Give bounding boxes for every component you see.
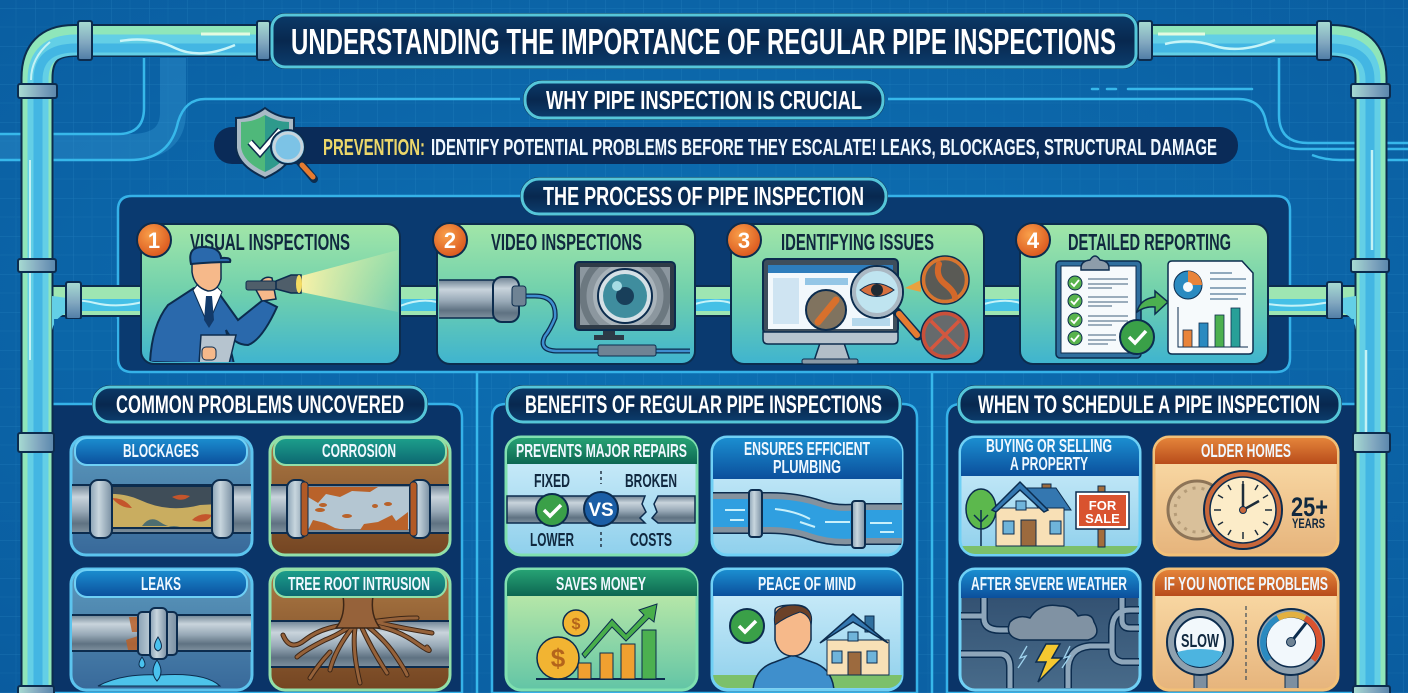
heading: benefits: BENEFITS OF REGULAR PIPE INSPECTIONS: [525, 391, 882, 419]
badge 1: [137, 223, 171, 257]
background patches beside process panel: [54, 319, 1354, 371]
card header: [960, 570, 1141, 598]
panel: schedule background: [947, 404, 1380, 693]
prevention label: PREVENTION:: [323, 134, 425, 160]
card header: A PROPERTY: [1010, 454, 1088, 474]
title: [270, 13, 1138, 69]
icon: large check badge: [1120, 320, 1154, 354]
heading: when to schedule: [957, 385, 1342, 424]
illustration: house for sale: [960, 482, 1141, 555]
card header: PREVENTS MAJOR REPAIRS: [516, 441, 687, 461]
heading: benefits: [505, 385, 902, 424]
badge 1: 1: [148, 228, 160, 253]
icon: pipe camera and monitor: [436, 254, 690, 356]
badge 3: [727, 223, 761, 257]
pipe: junction fills: [52, 296, 1356, 330]
card header: PEACE OF MIND: [758, 574, 856, 594]
badge 4: 4: [1027, 228, 1040, 253]
card header: PLUMBING: [773, 457, 841, 477]
for sale sign: FOR: [1089, 498, 1117, 513]
comparison labels: [530, 471, 677, 550]
comparison labels: COSTS: [630, 530, 672, 550]
heading: why pipe inspection is crucial: WHY PIPE INSPECTION IS CRUCIAL: [546, 85, 862, 115]
illustration: person, check and house: [712, 605, 903, 690]
illustration: coins and rising chart: $: [551, 643, 566, 673]
pipe: right run: [1146, 34, 1372, 693]
card header: LEAKS: [141, 574, 181, 594]
icon: checklist: [1056, 256, 1141, 358]
card header: [960, 436, 1141, 476]
card header: ENSURES EFFICIENT: [744, 439, 870, 459]
pipe: left run: [30, 34, 262, 693]
illustration: coins and rising chart: $: [572, 616, 581, 633]
label: 25+ years: 25+: [1291, 492, 1328, 522]
illustration: pressure gauge: [1258, 609, 1324, 690]
badge 2: [433, 223, 467, 257]
card: prevents major repairs: [506, 437, 698, 555]
badge 2: 2: [444, 228, 456, 253]
card header: [712, 438, 903, 479]
card: corrosion: [270, 437, 450, 555]
card header: BUYING OR SELLING: [986, 436, 1112, 456]
heading: common problems uncovered: [92, 385, 428, 424]
step 1 title: VISUAL INSPECTIONS: [190, 229, 350, 255]
card: tree root intrusion: [270, 569, 450, 690]
card: after severe weather: [960, 569, 1150, 690]
label: 25+ years: [1291, 492, 1328, 531]
illustration: leaking pipe: [70, 608, 255, 686]
illustration: slow drain gauge: [1167, 606, 1246, 690]
step 2: video inspections: [436, 224, 695, 364]
card header: [274, 438, 446, 465]
illustration: coins and rising chart: [536, 604, 665, 679]
prevention bar: [214, 127, 1238, 164]
icon: report document: [1168, 261, 1253, 354]
card header: BLOCKAGES: [123, 441, 199, 461]
step 4 title: DETAILED REPORTING: [1068, 229, 1231, 255]
card: buying or selling: [960, 436, 1141, 555]
card header: [75, 570, 247, 597]
comparison labels: LOWER: [530, 530, 574, 550]
card: ensures efficient plumbing: [712, 437, 905, 555]
card: peace of mind: [712, 569, 903, 690]
mid horizontal pipe: [45, 285, 1365, 317]
comparison labels: FIXED: [534, 471, 570, 491]
card header: SAVES MONEY: [556, 574, 646, 594]
heading: the process of pipe inspection: THE PROCESS OF PIPE INSPECTION: [543, 181, 864, 211]
card header: [712, 570, 903, 596]
comparison labels: BROKEN: [625, 471, 677, 491]
heading: why pipe inspection is crucial: [523, 80, 885, 120]
card: saves money: [506, 569, 698, 690]
step 1: visual inspections: [141, 224, 400, 364]
card: blockages: [70, 437, 255, 555]
card header: CORROSION: [322, 441, 396, 461]
panel: process background: [118, 196, 1290, 372]
illustration: flowing water pipe: [712, 490, 905, 548]
card: if you notice problems: [1154, 569, 1339, 690]
card header: [506, 438, 698, 464]
step number badges: [137, 223, 1050, 257]
label: 25+ years: YEARS: [1292, 515, 1325, 531]
illustration: fixed vs broken pipe: [507, 471, 695, 548]
icon: computer with magnified defect: [763, 256, 969, 364]
badge 3: 3: [738, 228, 750, 253]
icon: shield with magnifier: [236, 108, 314, 179]
card: leaks: [70, 569, 255, 690]
card header: AFTER SEVERE WEATHER: [971, 574, 1127, 594]
step 2 title: VIDEO INSPECTIONS: [491, 229, 642, 255]
card header: OLDER HOMES: [1201, 441, 1291, 461]
card header: [75, 438, 247, 465]
badge 4: [1016, 223, 1050, 257]
illustration: storm over pipes: [960, 598, 1150, 690]
card header: IF YOU NOTICE PROBLEMS: [1164, 574, 1328, 594]
illustration: fixed vs broken pipe: VS: [588, 500, 614, 521]
card: older homes: [1154, 437, 1339, 555]
heading: the process of pipe inspection: [520, 177, 888, 216]
for sale sign: [1076, 492, 1129, 529]
illustration: roots around pipe: [270, 596, 450, 683]
card header: [274, 570, 446, 597]
panel: common problems background: [30, 404, 462, 693]
illustration: clocks: [1168, 471, 1282, 549]
illustration: blocked pipe: [70, 480, 255, 538]
card header: [1154, 570, 1339, 596]
illustration: slow drain gauge: SLOW: [1181, 631, 1219, 651]
step 3: identifying issues: [731, 224, 984, 364]
icon: arrow to report: [1137, 291, 1168, 314]
heading: common problems uncovered: COMMON PROBLEMS UNCOVERED: [116, 391, 404, 419]
illustration: rusted pipe: [270, 480, 450, 538]
card header: TREE ROOT INTRUSION: [288, 574, 430, 594]
step 4: detailed reporting: [1020, 224, 1268, 364]
icon: inspector with flashlight: [150, 247, 398, 364]
step 3 title: IDENTIFYING ISSUES: [781, 229, 934, 255]
panel: benefits background: [492, 404, 917, 693]
for sale sign: SALE: [1085, 511, 1120, 526]
card header: [506, 570, 698, 596]
card header: [1154, 438, 1339, 464]
